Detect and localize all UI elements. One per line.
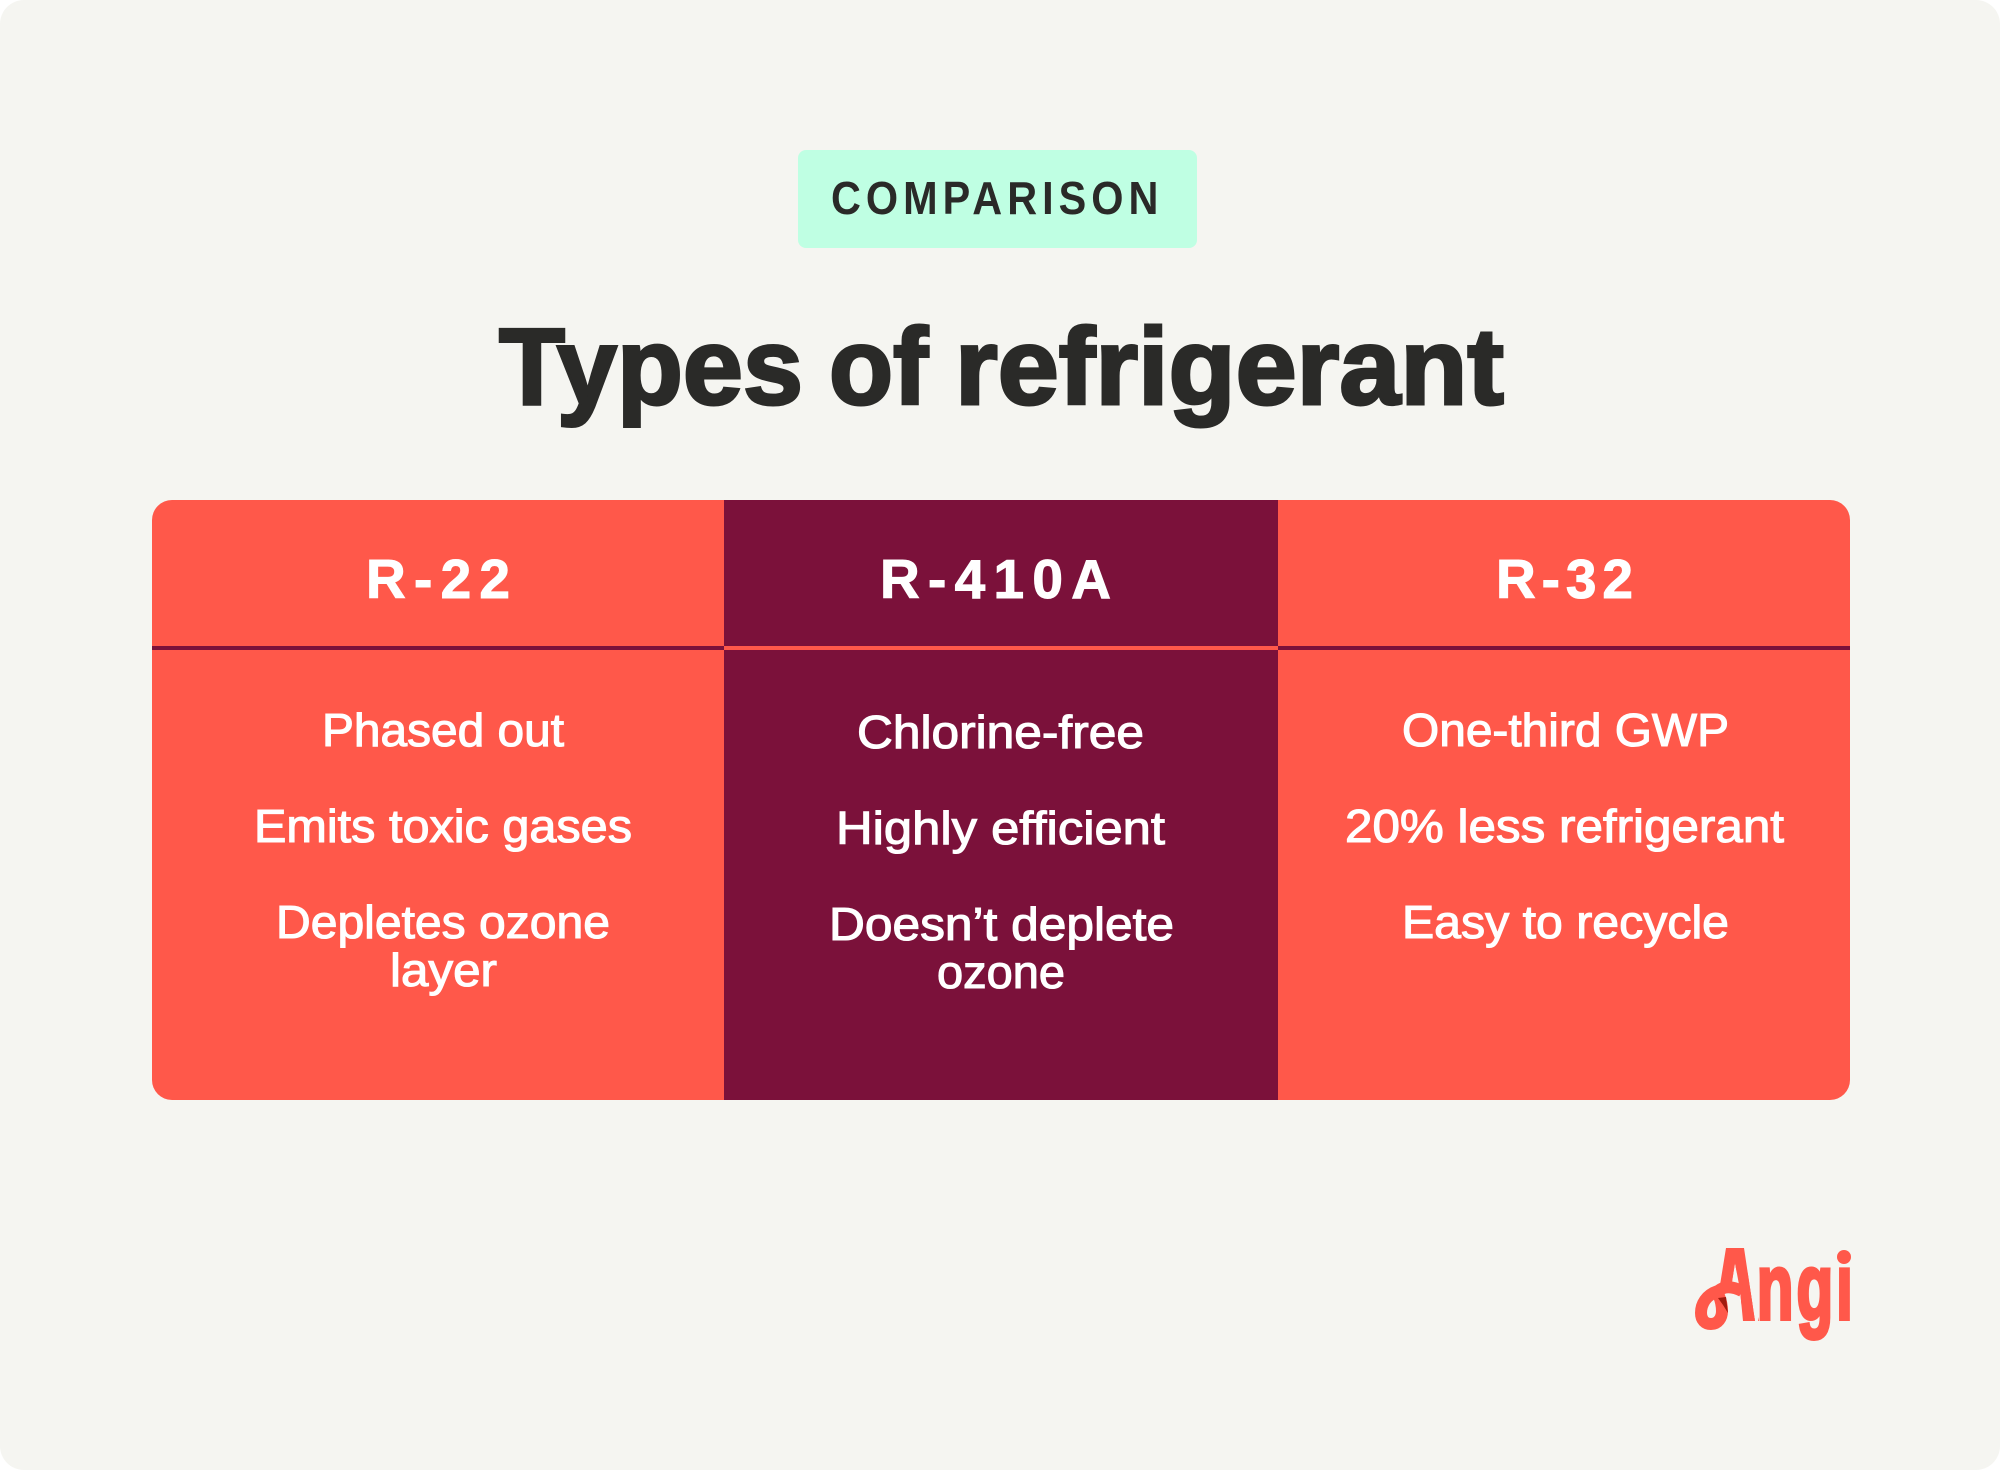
title: Types	[499, 306, 803, 428]
text: Depletes ozone layer: Depletes ozone	[276, 896, 610, 948]
text: Phased out: Phased out	[322, 704, 564, 756]
title: refrigerant	[955, 306, 1504, 428]
text: Doesn't deplete ozone: ozone	[937, 946, 1065, 998]
badge: comparison: COMPARISON	[831, 173, 1163, 225]
logo: Angi: Angi	[1715, 1234, 1853, 1339]
title: of	[829, 306, 929, 428]
column: R-32	[1278, 548, 1850, 948]
heading: R-22: R-22	[366, 548, 510, 610]
text: One-third GWP: One-third GWP	[1402, 704, 1729, 756]
heading: R-410A: R-410A	[880, 548, 1111, 610]
text: Emits toxic gases: Emits toxic gases	[254, 800, 632, 852]
text: Depletes ozone layer: layer	[390, 944, 497, 996]
text: Highly efficient: Highly efficient	[836, 802, 1165, 854]
column: R-410A	[724, 548, 1278, 998]
panel: R-410A column	[724, 500, 1278, 1100]
heading: R-32: R-32	[1496, 548, 1633, 610]
comparison table	[152, 500, 1850, 1100]
text: Chlorine-free: Chlorine-free	[857, 706, 1144, 758]
text: Depletes ozone layer	[276, 896, 610, 996]
title	[499, 306, 1504, 428]
panel: table background	[152, 500, 1850, 1100]
text: 20% less refrigerant: 20% less refrigerant	[1345, 800, 1784, 852]
text: Easy to recycle: Easy to recycle	[1402, 896, 1729, 948]
text: Doesn't deplete ozone: Doesn’t deplete	[829, 898, 1174, 950]
text: Doesn't deplete ozone	[829, 898, 1174, 998]
column: R-22	[152, 548, 724, 996]
badge: comparison	[798, 150, 1197, 248]
